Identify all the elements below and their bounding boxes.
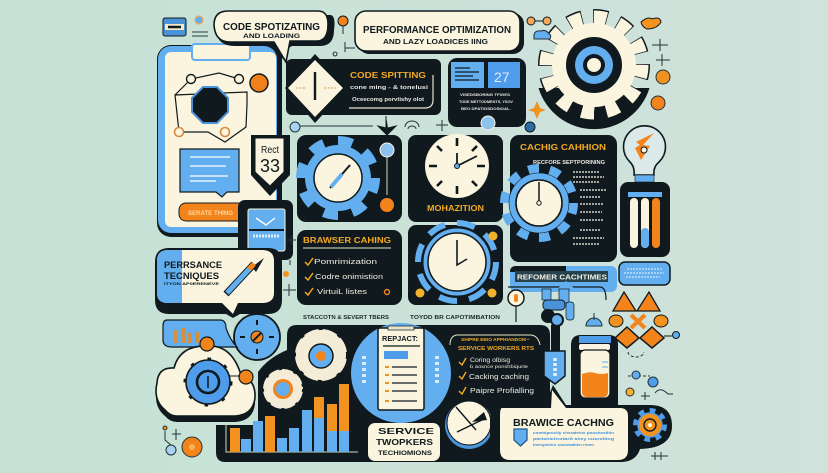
icon: pencil [226, 258, 264, 294]
panel: caching [506, 135, 617, 262]
speech bubble: performance optimization [355, 11, 524, 54]
panel: browser caching list: BRAWSER CAHING [303, 236, 391, 245]
description lines: partshichrotarit shey cusrohing [533, 436, 615, 441]
panel: clock memoization: MOHAZITION [427, 204, 484, 213]
button: SERATE THING [188, 211, 233, 217]
speech bubble: performance optimization: PERFORMANCE OPTIMIZATION [363, 24, 511, 36]
panel: stats 27: BEO DPATIOSDOSIOAL. [461, 106, 511, 111]
list: Codre onimistion [315, 272, 383, 281]
text block: service workers: SHIPRE EBIO APPHIANDOM • [461, 337, 529, 342]
panel: stats 27 [448, 58, 526, 127]
icons: orange diamonds [609, 292, 680, 348]
icon: shield [514, 429, 527, 446]
panel: caching: CACHIG CAHHION [520, 142, 606, 152]
speech bubble: performance techniques [155, 248, 282, 318]
card: mini chart [163, 320, 237, 347]
panel: caching: RECFORE SEPTPORINING [533, 160, 605, 166]
icon: small cream gear [263, 369, 303, 409]
text block: service workers: SERVICE WORKERS RTS [458, 346, 534, 352]
icon: dial [234, 314, 280, 360]
icon: server stack [508, 281, 606, 351]
panel: reformer cachtimes: REFOMER CACHTIMES [517, 274, 607, 282]
text block: service workers: Paipre Profialling [470, 388, 534, 395]
card: small mobile widget [238, 200, 293, 260]
panel: stats 27: VISEDSBORING TFIGES [460, 92, 510, 97]
caption: optimization labels: STACCOTN & SEVERT TBERS [303, 315, 389, 321]
panel: code splitting: Oceecomg porvtishy olot [352, 97, 424, 103]
text block: service workers: Coring olbisg [470, 357, 510, 364]
panel: stats 27: TODE METTODMENTS, YSOV [459, 99, 513, 104]
icon: light bulb [624, 126, 666, 182]
caption: optimization labels: TOYDD BR CAPOTIMBATION [410, 315, 500, 321]
panel: lower dashboard [216, 323, 550, 462]
description lines: linespichrs conswatien rmen [533, 442, 595, 447]
speech bubble: service workers [368, 423, 440, 461]
icon: cream gear [295, 329, 347, 381]
bar chart [226, 384, 358, 452]
speech bubble: code splitting and loading: AND LOADING [243, 33, 300, 40]
speech bubble: performance optimization: AND LAZY LOADICES IING [383, 37, 488, 46]
icon: blue tag [544, 351, 565, 384]
icon: blue clock gear [418, 223, 496, 301]
speech bubble: performance techniques: TECNIQUES [164, 271, 219, 282]
speech bubble: service workers: TWOPKERS [376, 437, 433, 447]
panel: browser caching bubble [490, 385, 672, 462]
description lines [533, 430, 615, 447]
panel: clock memoization [408, 134, 503, 222]
panel: browser caching bubble: BRAWICE CACHNG [513, 417, 614, 429]
panel: second clock [408, 223, 503, 305]
description lines: comniprocily chsrateine pouchvsthin [533, 430, 615, 435]
panel: reformer cachtimes [510, 266, 617, 292]
icon: clock [425, 134, 489, 198]
chat card [180, 149, 239, 197]
badge: React 33: Rect [261, 145, 279, 156]
icon: blue gear [302, 142, 374, 214]
icon: location pin [508, 290, 524, 322]
panel: code splitting: CODE SPITTING [350, 70, 426, 80]
speech bubble: performance techniques: PERRSANCE [164, 260, 222, 271]
list: VirtuiL listes [317, 287, 367, 296]
icon: crossed clock [445, 401, 493, 449]
icon: large gear [538, 17, 650, 129]
list: Pomrimization [314, 257, 377, 266]
panel: mobile app card [157, 44, 282, 237]
icon: blue gear [506, 170, 572, 236]
panel: code splitting: cone ming - & tonelusi [350, 85, 429, 91]
panel: jar [571, 335, 618, 405]
panel: browser caching list [297, 230, 402, 305]
text block: service workers: b aoxnce ponshbiqurte [470, 364, 529, 369]
speech bubble: service workers: SERVICE [378, 426, 434, 436]
icon: diamond gauge [285, 54, 347, 123]
icon: octagon network [174, 73, 268, 142]
panel: compass gear [297, 135, 402, 222]
panel: code splitting [285, 54, 441, 123]
decorative icons: small symbols [163, 16, 673, 460]
caption: optimization labels [303, 315, 500, 321]
icon: report document [351, 323, 451, 423]
icon: cloud with gear [156, 337, 255, 422]
card: blue note [619, 262, 670, 285]
text block: service workers [450, 335, 540, 395]
icon: window mini [163, 16, 208, 36]
button [179, 203, 249, 221]
speech bubble: performance techniques: ITYON AP0ERENEVE [164, 281, 219, 286]
list [305, 257, 383, 296]
badge: React 33 [251, 135, 290, 196]
icon: orange gear [636, 411, 664, 439]
badge: React 33: 33 [260, 156, 280, 176]
panel: test tubes [620, 182, 670, 257]
speech bubble: code splitting and loading [214, 11, 334, 65]
speech bubble: code splitting and loading: CODE SPOTIZATING [223, 21, 320, 33]
panel: stats 27: 27 [494, 69, 510, 85]
speech bubble: service workers: TECHIOMIONS [378, 450, 433, 457]
text block: service workers: Cacking caching [469, 374, 529, 381]
icon: report document: REPJACT: [382, 334, 418, 343]
